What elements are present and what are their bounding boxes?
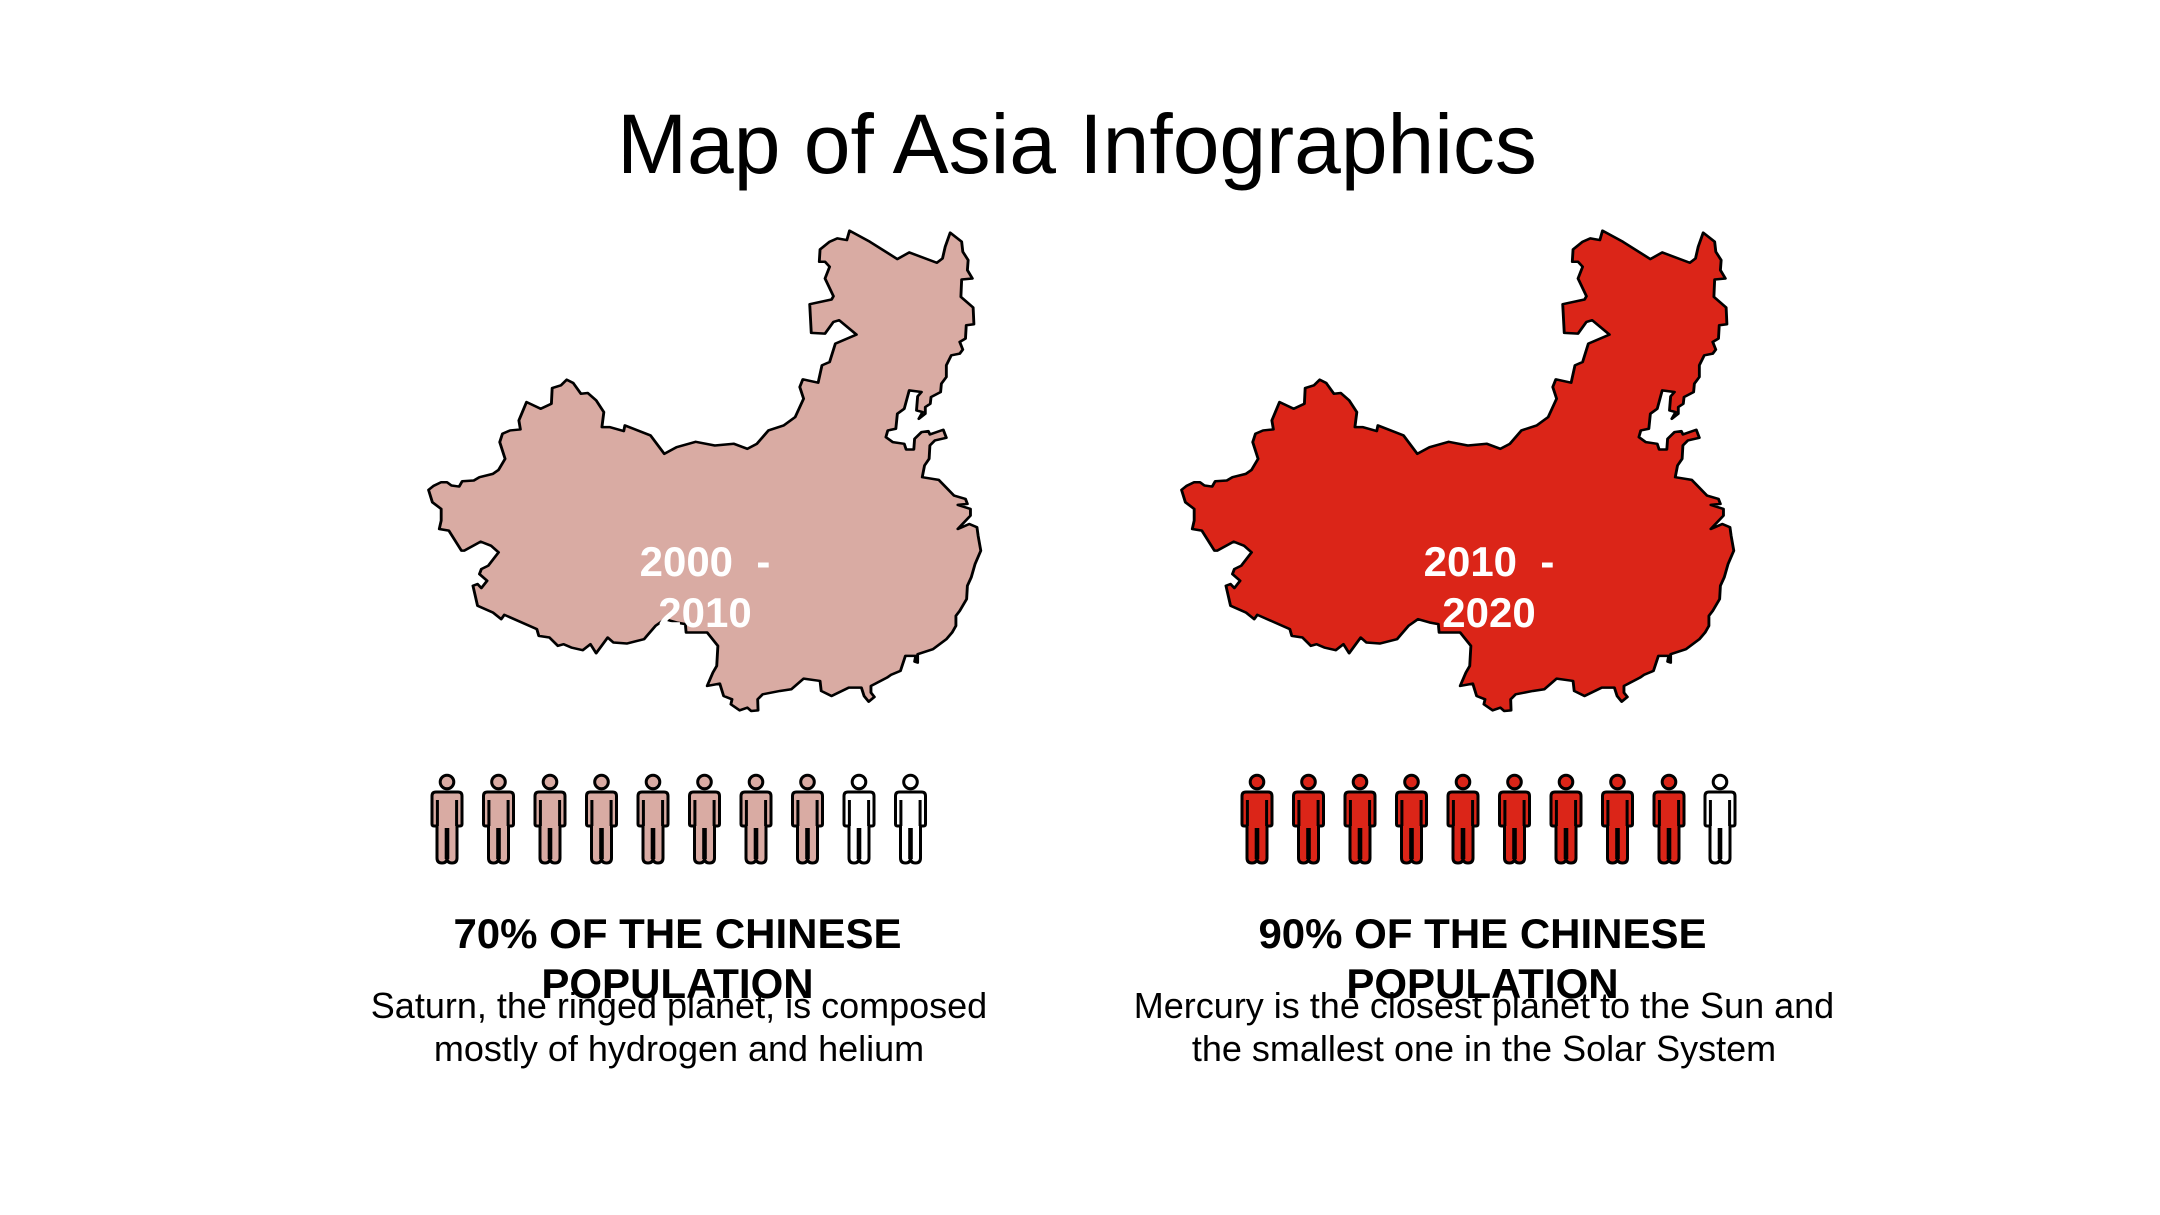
- heading right: 90% OF THE CHINESE POPULATION: [1258, 910, 1707, 1007]
- description right: Mercury is the closest planet to the Sun and the smallest one in the Solar System: [1134, 985, 1834, 1069]
- map: left China 2000-2010: [429, 231, 981, 711]
- heading left: 70% OF THE CHINESE POPULATION: [453, 910, 902, 1007]
- year label left: 2000 - 2010: [640, 538, 770, 636]
- map: right China 2010-2020: [1182, 231, 1734, 711]
- year label right: 2010 - 2020: [1424, 538, 1554, 636]
- pictogram: 9 of 10 people filled, right: [1242, 775, 1735, 863]
- title: Map of Asia Infographics: [617, 97, 1537, 191]
- pictogram: 8 of 10 people filled, left: [432, 775, 926, 863]
- description left: Saturn, the ringed planet, is composed mostly of hydrogen and helium: [371, 985, 987, 1069]
